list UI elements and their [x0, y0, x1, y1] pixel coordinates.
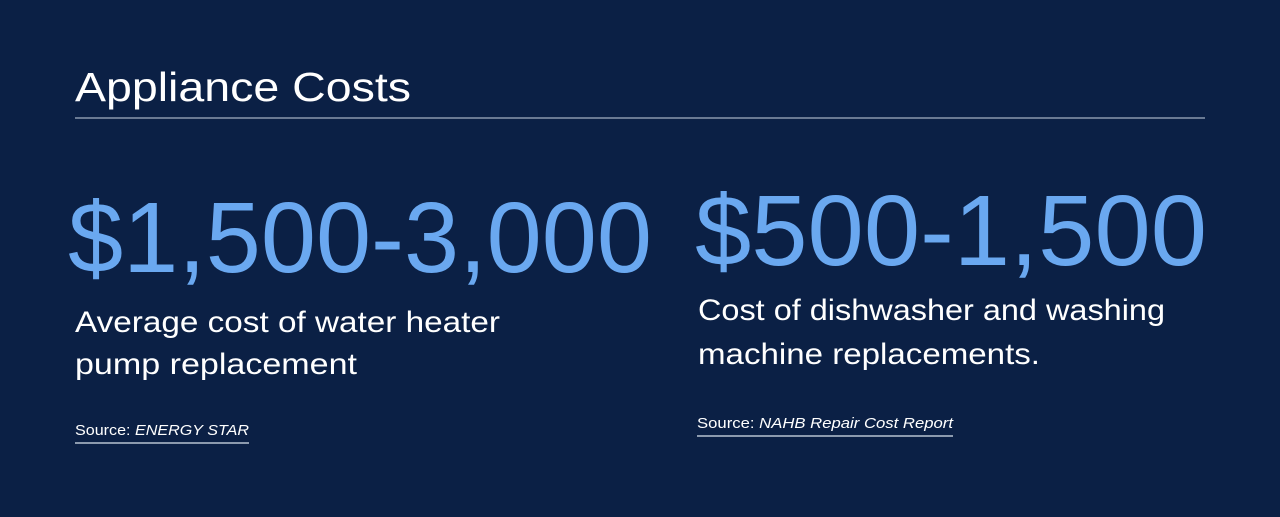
description: water heater: pump replacement — [75, 348, 358, 381]
panel: water heater — [68, 182, 652, 443]
description: dishwasher: Cost of dishwasher and washing — [698, 294, 1165, 327]
stat: 500-1500: $500-1,500 — [695, 175, 1207, 287]
description: water heater: Average cost of water heater — [75, 306, 500, 339]
panel: dishwasher — [695, 175, 1207, 436]
title: Appliance Costs — [75, 64, 411, 110]
description: dishwasher — [698, 294, 1165, 371]
description: water heater — [75, 306, 500, 381]
source: ENERGY STAR: Source: ENERGY STAR — [75, 422, 249, 439]
stat: 1500-3000: $1,500-3,000 — [68, 182, 652, 294]
description: dishwasher: machine replacements. — [698, 338, 1040, 371]
source: NAHB: Source: NAHB Repair Cost Report — [697, 415, 954, 432]
